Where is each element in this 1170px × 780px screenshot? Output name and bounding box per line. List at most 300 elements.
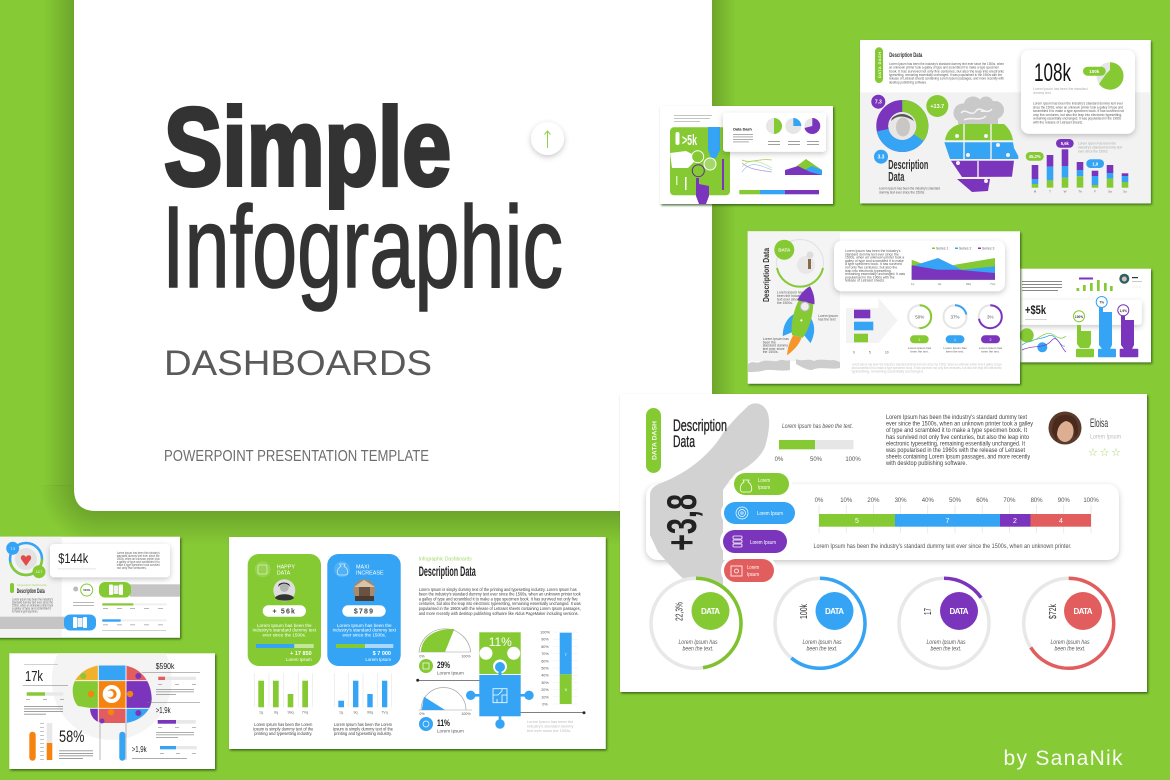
metric: >1,9k lower: >1,9k: [132, 744, 147, 754]
chart: vertical stacked bar: 20%: [541, 688, 549, 692]
chart: green bars: 1q: [259, 710, 263, 714]
text block: upper: Lorem Ipsum has: [777, 290, 803, 294]
panel: slide with cards and puzzle: [229, 537, 606, 749]
text block: blue bars caption: [333, 722, 393, 737]
icon: blue car: [64, 614, 96, 630]
metric: >1,9k upper: >1,9k: [156, 705, 171, 715]
chart: blue bars: 7Vq: [381, 710, 388, 714]
badge: +13.7: +13.7: [930, 104, 944, 110]
chart: stacked weekly bars: Sa: [1108, 190, 1112, 194]
text: name, role, stars: Eloisa: [1090, 416, 1108, 430]
pill: blue finger: Lorem Ipsum: [757, 511, 783, 517]
metric: 58%: [29, 723, 93, 761]
card: three pie charts: Data Dash: [733, 128, 753, 132]
legend: [932, 246, 995, 250]
chart: stacked areas: 9q: [938, 282, 942, 286]
card: +$5k: +$5k: [1025, 303, 1046, 317]
heading: description data: Lorem Ipsum has been the industry's standard: [879, 186, 940, 190]
pill: red finger: Ipsum: [747, 572, 759, 578]
panel: white metric band: [646, 484, 1119, 560]
chart: purple ring: been the text.: [981, 349, 1000, 353]
card: area chart: [834, 241, 1005, 291]
chart: stacked horizontal bar: Lorem Ipsum has been the industry's standard dummy text ever since the 1500s, when an unknown printer.: [814, 543, 1072, 550]
chart: gauge 11%: [419, 688, 472, 734]
text block: description: been the industry's standard dummy text ever since the 1500s, when an unknown printer took: [419, 592, 581, 597]
card: 108k: with the release of Letraset sheets.: [1033, 120, 1083, 124]
card: area chart: a type specimen book. It has survived: [845, 262, 902, 266]
illustration: puzzle brain: [72, 666, 152, 724]
illustration: arrow with bars: [846, 298, 898, 354]
heading: description data: Description: [888, 157, 928, 172]
card: 108k: only five centuries, but also the leap into electronic typesetting,: [1033, 113, 1122, 117]
text block: green bars caption: [253, 722, 314, 737]
chart: blue bars: 1q: [339, 710, 343, 714]
chart: stacked horizontal bar: 2: [1013, 518, 1017, 525]
puzzle: green piece: 11%: [489, 635, 512, 649]
text block: lower left: [763, 337, 789, 354]
card: maxi increase: industry's standard dummy text: [333, 628, 397, 633]
text block: blue bars caption: printing and typesetting industry.: [334, 731, 392, 737]
text block: description paragraph: ever since the 1500s, when an unknown printer took a galley: [886, 421, 1034, 428]
card: happy data: ever since the 1500s.: [262, 632, 306, 637]
subtitle: presentation template: POWERPOINT PRESENTATION TEMPLATE: [164, 448, 429, 465]
text block: upper: text ever since: [777, 298, 799, 302]
chart: line chart with bubbles: [1020, 328, 1066, 352]
card: $144k: make a type specimen book survived: [117, 563, 160, 567]
progress: single bar: 100%: [845, 457, 861, 463]
gauge: $72k red: [1024, 578, 1114, 668]
value: +3,8: +3,8: [658, 494, 705, 551]
illustration: thumb up hand: [650, 403, 769, 590]
credit: by SanaNik: by SanaNik: [1004, 747, 1123, 770]
card: area chart: remaining essentially unchanged. It was: [845, 272, 905, 276]
card: maxi increase: $ 7 000: [373, 651, 391, 657]
heading and text: typesetting, remaining essentially unchanged. It was popularised in the 1960s with the: [889, 73, 1002, 77]
chart: blue ring: [943, 305, 967, 353]
badge: 3.3: [874, 150, 888, 164]
icon: blue hand: 7%: [1099, 300, 1104, 304]
pill: data dash: DATA DASH: [878, 52, 882, 78]
text block: gray note: and scrambled it to make a type specimen book. It has survived not only five centuries, but also the leap into electronic: [852, 366, 1002, 370]
card: happy data: DATA: [277, 570, 291, 576]
heading: description data: Description Data: [17, 589, 45, 595]
heading: description data: dummy text ever since the 1500s.: [879, 190, 925, 194]
text block: description: popularised in the 1960s with the release of Letraset sheets containing Lorem Ipsum passages,: [419, 606, 581, 611]
text block: standard dummy text ever since the: [12, 600, 53, 604]
chart: stacked areas: 99q: [966, 282, 971, 286]
heading: description data: Infographic Dashboards: [17, 583, 47, 587]
card: $144k: Lorem Ipsum has been the industry's: [117, 551, 160, 555]
chart: stacked weekly bars: industry's standard dummy text: [1078, 146, 1122, 150]
progress: single bar: [775, 424, 861, 463]
text block: 1500s, when an unknown printer took: [12, 604, 53, 608]
chart: gauge 29%: 0%: [419, 654, 425, 658]
icon: purple hand: [1118, 305, 1138, 357]
metric: >1,9k upper: [156, 705, 196, 738]
progress: single bar: 50%: [810, 457, 823, 463]
chart: stacked horizontal bar: 80%: [1031, 498, 1043, 504]
text block: lower left: been the: [763, 340, 776, 344]
chart: stacked weekly bars: W: [1064, 190, 1067, 194]
pill: data dash: DATA DASH: [652, 421, 658, 460]
chart: stacked horizontal bar: 100%: [1083, 498, 1099, 504]
legend: Series 1: [936, 246, 949, 250]
chart: gauge 29%: 29%: [437, 660, 450, 670]
chart: gauge 29%: Lorem Ipsum: [437, 670, 464, 676]
text block: gray note: Lorem Ipsum has been the industry's standard dummy text ever since the 1500s, when an unknown printer took a galley of type: [852, 362, 1002, 366]
panel: main title card: [74, 0, 712, 511]
chart: ring with data badge: [774, 240, 824, 287]
badge: 7.3: [871, 95, 885, 109]
pill: blue finger: [721, 499, 798, 527]
chart: blue ring: been the text.: [946, 349, 964, 353]
text block: green bars caption: Ipsum is simply dummy text of the: [253, 726, 314, 732]
pill: green finger: [731, 470, 792, 498]
card: $144k: 1500s, when an unknown printer took: [117, 557, 160, 561]
gauge: 22,3% green: [651, 578, 741, 668]
text block: description: centuries, but also the leap into electronic typesetting, remaining essentially unchanged. It was: [419, 601, 581, 606]
chart: stacked horizontal bar: 4: [1059, 518, 1063, 525]
text: name and stars: ☆☆☆: [1132, 285, 1141, 289]
icon: green hand: 100%: [1075, 315, 1083, 319]
panel: slide with rocket: [748, 231, 1020, 384]
card: 108k: remaining essentially unchanged. It was popularised in the 1960s: [1033, 117, 1121, 121]
gauge: 100k blue: been the text.: [806, 646, 838, 653]
card: area chart: popularised in the 1960s with the: [845, 275, 895, 279]
text block: description paragraph: with desktop publishing software.: [885, 460, 967, 467]
chart: stacked weekly bars: Lorem Ipsum has been the: [1078, 142, 1116, 146]
metric: >1,9k lower: [119, 732, 197, 761]
card: 108k: dummy text.: [1033, 91, 1052, 95]
progress: single bar: 0%: [775, 457, 784, 463]
chart: green ring: Lorem Ipsum has: [908, 346, 932, 350]
chart: vertical stacked bar: 5: [565, 687, 568, 692]
chart: stacked weekly bars: ever since the 1500s.: [1078, 150, 1108, 154]
chart: purple ring: [979, 305, 1003, 353]
text block: right of rocket: Lorem Ipsum: [818, 314, 838, 318]
gauge: $72k red: Lorem Ipsum has: [1050, 639, 1090, 646]
chart: vertical stacked bar: 60%: [541, 659, 549, 663]
text block: description paragraph: Lorem Ipsum has been the industry's standard dummy text: [886, 414, 1027, 421]
chart: vertical stacked bar: 90%: [541, 638, 549, 642]
chart: vertical stacked bar: 0%: [542, 702, 548, 706]
text: name, role, stars: Lorem Ipsum: [1090, 434, 1121, 440]
card: $144k: $144k: [58, 550, 89, 566]
gauge: 22,3% green: DATA: [701, 607, 720, 616]
illustration: arrow with bars: 10: [885, 350, 889, 354]
text block: green bars caption: Lorem Ipsum has been the Lorem: [254, 722, 312, 728]
chart: stacked weekly bars: Su: [1123, 190, 1127, 194]
chart: stacked weekly bars: Th: [1078, 190, 1082, 194]
pill: green finger: Ipsum: [758, 485, 770, 491]
chart: small green bars: [1076, 278, 1113, 291]
heading: description data: [879, 157, 940, 194]
card: maxi increase: Lorem Ipsum has been the: [337, 623, 392, 628]
card: 108k: 108k: [1034, 59, 1071, 87]
chart: blue ring: 1: [954, 338, 956, 342]
card: maxi increase: [327, 554, 401, 666]
heading and text: desktop publishing software.: [889, 80, 927, 84]
chart: stacked horizontal bar: [814, 498, 1099, 550]
card: maxi increase: INCREASE: [356, 570, 384, 576]
text block: blue bars caption: Lorem Ipsum has been the Lorem: [334, 722, 392, 728]
gauge: 100k blue: Lorem Ipsum has: [802, 639, 842, 646]
panel: large thumb slide: [620, 394, 1147, 692]
icon: blue hand: [1096, 296, 1116, 357]
gauge: $72k red: been the text.: [1054, 646, 1086, 653]
card: $144k: [50, 544, 170, 577]
card: happy data: HAPPY: [277, 564, 295, 570]
chart: vertical stacked bar: 30%: [541, 681, 549, 685]
illustration: brain: [954, 96, 1004, 124]
text block: a galley of type and scrambled it: [12, 606, 51, 610]
heading: description data: Data: [673, 432, 695, 451]
chart: stacked weekly bars: [1026, 139, 1128, 194]
text block: description: Lorem Ipsum is simply dummy text of the printing and typesetting industry. Lorem Ipsum has: [419, 587, 577, 592]
chart: heart ring: [6, 542, 45, 578]
connector lines: [23, 672, 200, 760]
chart: stacked weekly bars: 45,2%: [1029, 154, 1041, 159]
chart: stacked horizontal bar: 7: [946, 518, 950, 525]
pill: red finger: Lorem: [747, 565, 759, 571]
chart: stacked weekly bars: M: [1034, 190, 1037, 194]
chart: stacked horizontal bar: 0%: [815, 498, 824, 504]
chart: green bars: [254, 673, 312, 714]
heading: description data: Description: [673, 416, 727, 435]
chart: vertical stacked bar: 70%: [541, 652, 549, 656]
card: area chart: galley of type and scrambled it to make: [845, 259, 904, 263]
pill: red finger: [721, 556, 777, 585]
text block: gray note: industry's standard dummy: [527, 724, 573, 728]
chart: stacked horizontal bar: 60%: [976, 498, 989, 504]
gauge: 17 purple: DATA: [950, 607, 969, 616]
pill: data dash: [646, 408, 661, 473]
illustration: smoke clouds: [748, 359, 840, 372]
heading: description data: [10, 583, 47, 595]
panel: slide with +$5k and hands: [1010, 269, 1151, 362]
chart: purple ring: 3%: [987, 314, 994, 320]
title: Simple: Simple: [164, 86, 451, 209]
chart: gauge 11%: 11%: [437, 718, 450, 728]
chart: stacked horizontal bar: 10%: [840, 498, 853, 504]
heading: vertical description data: Description Data: [761, 248, 771, 302]
gauge: 100k blue: 100k: [799, 603, 810, 619]
text block: description: [419, 587, 581, 616]
text: name and stars: [1132, 277, 1142, 289]
gauge: 17 purple: Lorem Ipsum has: [926, 639, 966, 646]
badge: 3.3: 3.3: [878, 154, 885, 160]
gauge: 17 purple: been the text.: [930, 646, 962, 653]
card: area chart: release of Letraset sheets.: [845, 279, 885, 283]
text block: description paragraph: sheets containing Lorem Ipsum passages, and more recently: [886, 454, 1031, 461]
card: maxi increase: $789: [354, 608, 374, 616]
progress: single bar: Lorem Ipsum has been the text.: [782, 424, 853, 430]
subtitle: dashboards: DASHBOARDS: [164, 344, 432, 383]
text block: description paragraph: has survived not only five centuries, but also the leap into: [886, 434, 1030, 441]
heading and text: book. It has survived not only five centuries, but also the leap into electronic: [889, 69, 1004, 73]
card: $144k: not only five centuries.: [117, 566, 147, 570]
metric: $590k: $590k: [156, 661, 175, 671]
card: 108k: Lorem Ipsum has been the standard: [1033, 87, 1088, 91]
card: area chart: standard dummy text ever since the: [845, 252, 899, 256]
metric: 17k: 17k: [25, 668, 43, 685]
panel: green hands block: >5k: [682, 132, 697, 149]
chart: green ring: been the text.: [910, 349, 929, 353]
chart: heart ring: 7.3: [10, 547, 15, 551]
gauge: 17 purple: 17: [923, 608, 934, 615]
chart: stacked horizontal bar: 90%: [1058, 498, 1070, 504]
gauge: 22,3% green: Lorem Ipsum has: [678, 639, 718, 646]
text: intro lines: [674, 115, 712, 122]
text block: gray note: text ever since the 1500s.: [527, 728, 571, 733]
gauge: $72k red: $72k: [1048, 603, 1059, 619]
icon: up arrow button: [531, 122, 564, 155]
text block: gray note: typesetting, remaining essentially unchanged.: [852, 370, 924, 374]
heading: description data: [419, 556, 476, 579]
text block: lower left: standard dummy: [763, 344, 788, 348]
chart: stacked horizontal bar: 50%: [949, 498, 962, 504]
chart: stacked horizontal bar: 40%: [922, 498, 934, 504]
panel: slide with pointing hands and pie charts: [660, 106, 833, 204]
chart: ring with data badge: DATA: [778, 248, 791, 252]
illustration: arrow with bars: 0: [853, 350, 855, 354]
card: happy data: industry's standard dummy text: [253, 628, 317, 633]
metric: 17k: [24, 664, 64, 714]
card: 108k: since the 1500s, when an unknown printer took a galley of type and: [1033, 105, 1123, 109]
badge: 100% ring: 100%: [83, 588, 91, 592]
pill: data dash: [875, 47, 883, 83]
card: area chart: not only five centuries, but also the: [845, 266, 897, 270]
text block: description: a galley of type and scrambled it to make a type specimen book. It has survived not only five: [419, 596, 578, 601]
connector lines: [416, 679, 585, 714]
pill: purple finger: Lorem Ipsum: [750, 540, 776, 546]
text block: [1022, 281, 1062, 291]
gauge: 17 purple: [899, 578, 989, 668]
card: area chart: 1500s, when an unknown printer took a: [845, 256, 904, 260]
chart: stacked areas: 7Vq: [990, 282, 996, 286]
metric: $590k: [156, 661, 196, 695]
card: maxi increase: ever since the 1500s.: [342, 632, 386, 637]
card: 108k: Lorem Ipsum has been the industry's standard dummy text ever: [1033, 102, 1124, 106]
gauge: 22,3% green: been the text.: [682, 646, 714, 653]
heading and text: [889, 53, 1004, 84]
chart: stacked areas: 1q: [911, 282, 915, 286]
icon: purple hand: 1,9%: [1120, 309, 1127, 313]
chart: vertical stacked bar: 7: [565, 652, 568, 657]
chart: vertical stacked bar: 100%: [540, 630, 550, 634]
chart: green bars: 9q: [274, 710, 278, 714]
chart: stacked weekly bars: 1,9: [1092, 161, 1099, 166]
card: happy data: [248, 554, 321, 666]
chart: blue bars: 9q: [354, 710, 358, 714]
chart: purple ring: 2: [990, 338, 992, 342]
text block: right of rocket: [818, 314, 838, 322]
card: maxi increase: MAXI: [356, 564, 369, 570]
gauge: 100k blue: [775, 578, 865, 668]
chart: vertical stacked bar: 10%: [541, 695, 549, 699]
text block: [12, 598, 53, 614]
badge: 7.3: 7.3: [875, 100, 882, 106]
text block: upper: been the Industry: [777, 294, 804, 298]
illustration: rocket: [777, 283, 825, 360]
chart: pie: 100k: [1089, 69, 1100, 74]
chart: blue bars: [334, 673, 392, 714]
card: area chart: leap into electronic typesetting,: [845, 269, 892, 273]
heading: description data: Data: [888, 169, 905, 184]
text block: lower left: Lorem Ipsum has: [763, 337, 789, 341]
chart: blue progress: [102, 619, 167, 631]
text block: description: and more recently with desktop publishing software like Aldus PageMaker including versions.: [419, 611, 579, 616]
panel: slide with cars: [0, 537, 180, 638]
chart: green progress: [102, 603, 167, 609]
pill: purple finger: [720, 527, 790, 556]
chart: gauge 11%: Lorem Ipsum: [437, 728, 464, 734]
avatar: Eloisa: [1048, 412, 1082, 444]
badge: +13.7: [926, 95, 948, 117]
chart: stacked horizontal bar: 70%: [1003, 498, 1016, 504]
background circle: [52, 653, 172, 740]
card: happy data: + 17 850: [290, 651, 312, 657]
chart: green ring: 1: [918, 338, 920, 342]
gauge: 22,3% green: 22,3%: [674, 602, 686, 621]
chart: stacked weekly bars: T: [1049, 190, 1051, 194]
chart: purple ring: Lorem Ipsum has: [979, 346, 1003, 350]
puzzle: blue piece: [466, 662, 534, 729]
text block: gray note: [852, 362, 1002, 374]
text block: green bars caption: printing and typesetting industry.: [254, 731, 312, 737]
chart: donut with face: [882, 106, 922, 146]
card: $144k: a galley of type and scrambled it to: [117, 560, 160, 564]
chart: vertical stacked bar: 80%: [541, 645, 549, 649]
text block: upper: [777, 290, 804, 305]
text block: lower left: text ever since: [763, 347, 785, 351]
panel: green hands block: [670, 127, 730, 204]
card: $144k: standard dummy text ever since the: [117, 554, 160, 558]
chart: gauge 29%: 100%: [461, 654, 471, 658]
text block: description paragraph: [885, 414, 1034, 467]
panel: slide with head puzzle and donut: [860, 40, 1151, 203]
chart: vertical stacked bar: 50%: [541, 666, 549, 670]
text block: gray note: [527, 719, 573, 733]
card: 108k: [1021, 50, 1135, 134]
chart: blue ring: 37%: [950, 314, 960, 320]
chart: stacked areas: [911, 258, 996, 286]
chart: line chart: [742, 160, 772, 172]
heading and text: Description Data: [889, 53, 923, 59]
heading: description data: Description Data: [419, 563, 476, 579]
chart: heart ring: 13.7: [36, 570, 42, 574]
chart: blue ring: Lorem Ipsum has: [943, 346, 967, 350]
chart: stacked weekly bars: 5,6k: [1061, 141, 1070, 146]
heading: description data: [673, 416, 727, 451]
text block: blue bars caption: Ipsum is simply dummy text of the: [333, 726, 393, 732]
chart: gauge 29%: [419, 629, 471, 676]
chart: stacked horizontal bar: 5: [855, 518, 859, 525]
card: happy data: + 56k: [272, 608, 296, 616]
chart: stacked legend bar: [739, 190, 819, 194]
text block: description paragraph: electronic typesetting, remaining essentially unchanged. It: [886, 440, 1025, 447]
text block: Lorem Ipsum has been the industry's: [12, 598, 53, 602]
puzzle: green piece: [479, 632, 521, 674]
icon: green car: [99, 582, 131, 598]
card: three pie charts: [723, 113, 826, 152]
chart: area chart: [785, 159, 822, 175]
card: maxi increase: Lorem Ipsum: [365, 657, 391, 662]
text: name, role, stars: ☆☆☆: [1088, 447, 1121, 459]
legend: Series 3: [982, 246, 995, 250]
chart: stacked weekly bars: F: [1094, 190, 1096, 194]
text block: upper: the 1500s.: [777, 301, 793, 305]
